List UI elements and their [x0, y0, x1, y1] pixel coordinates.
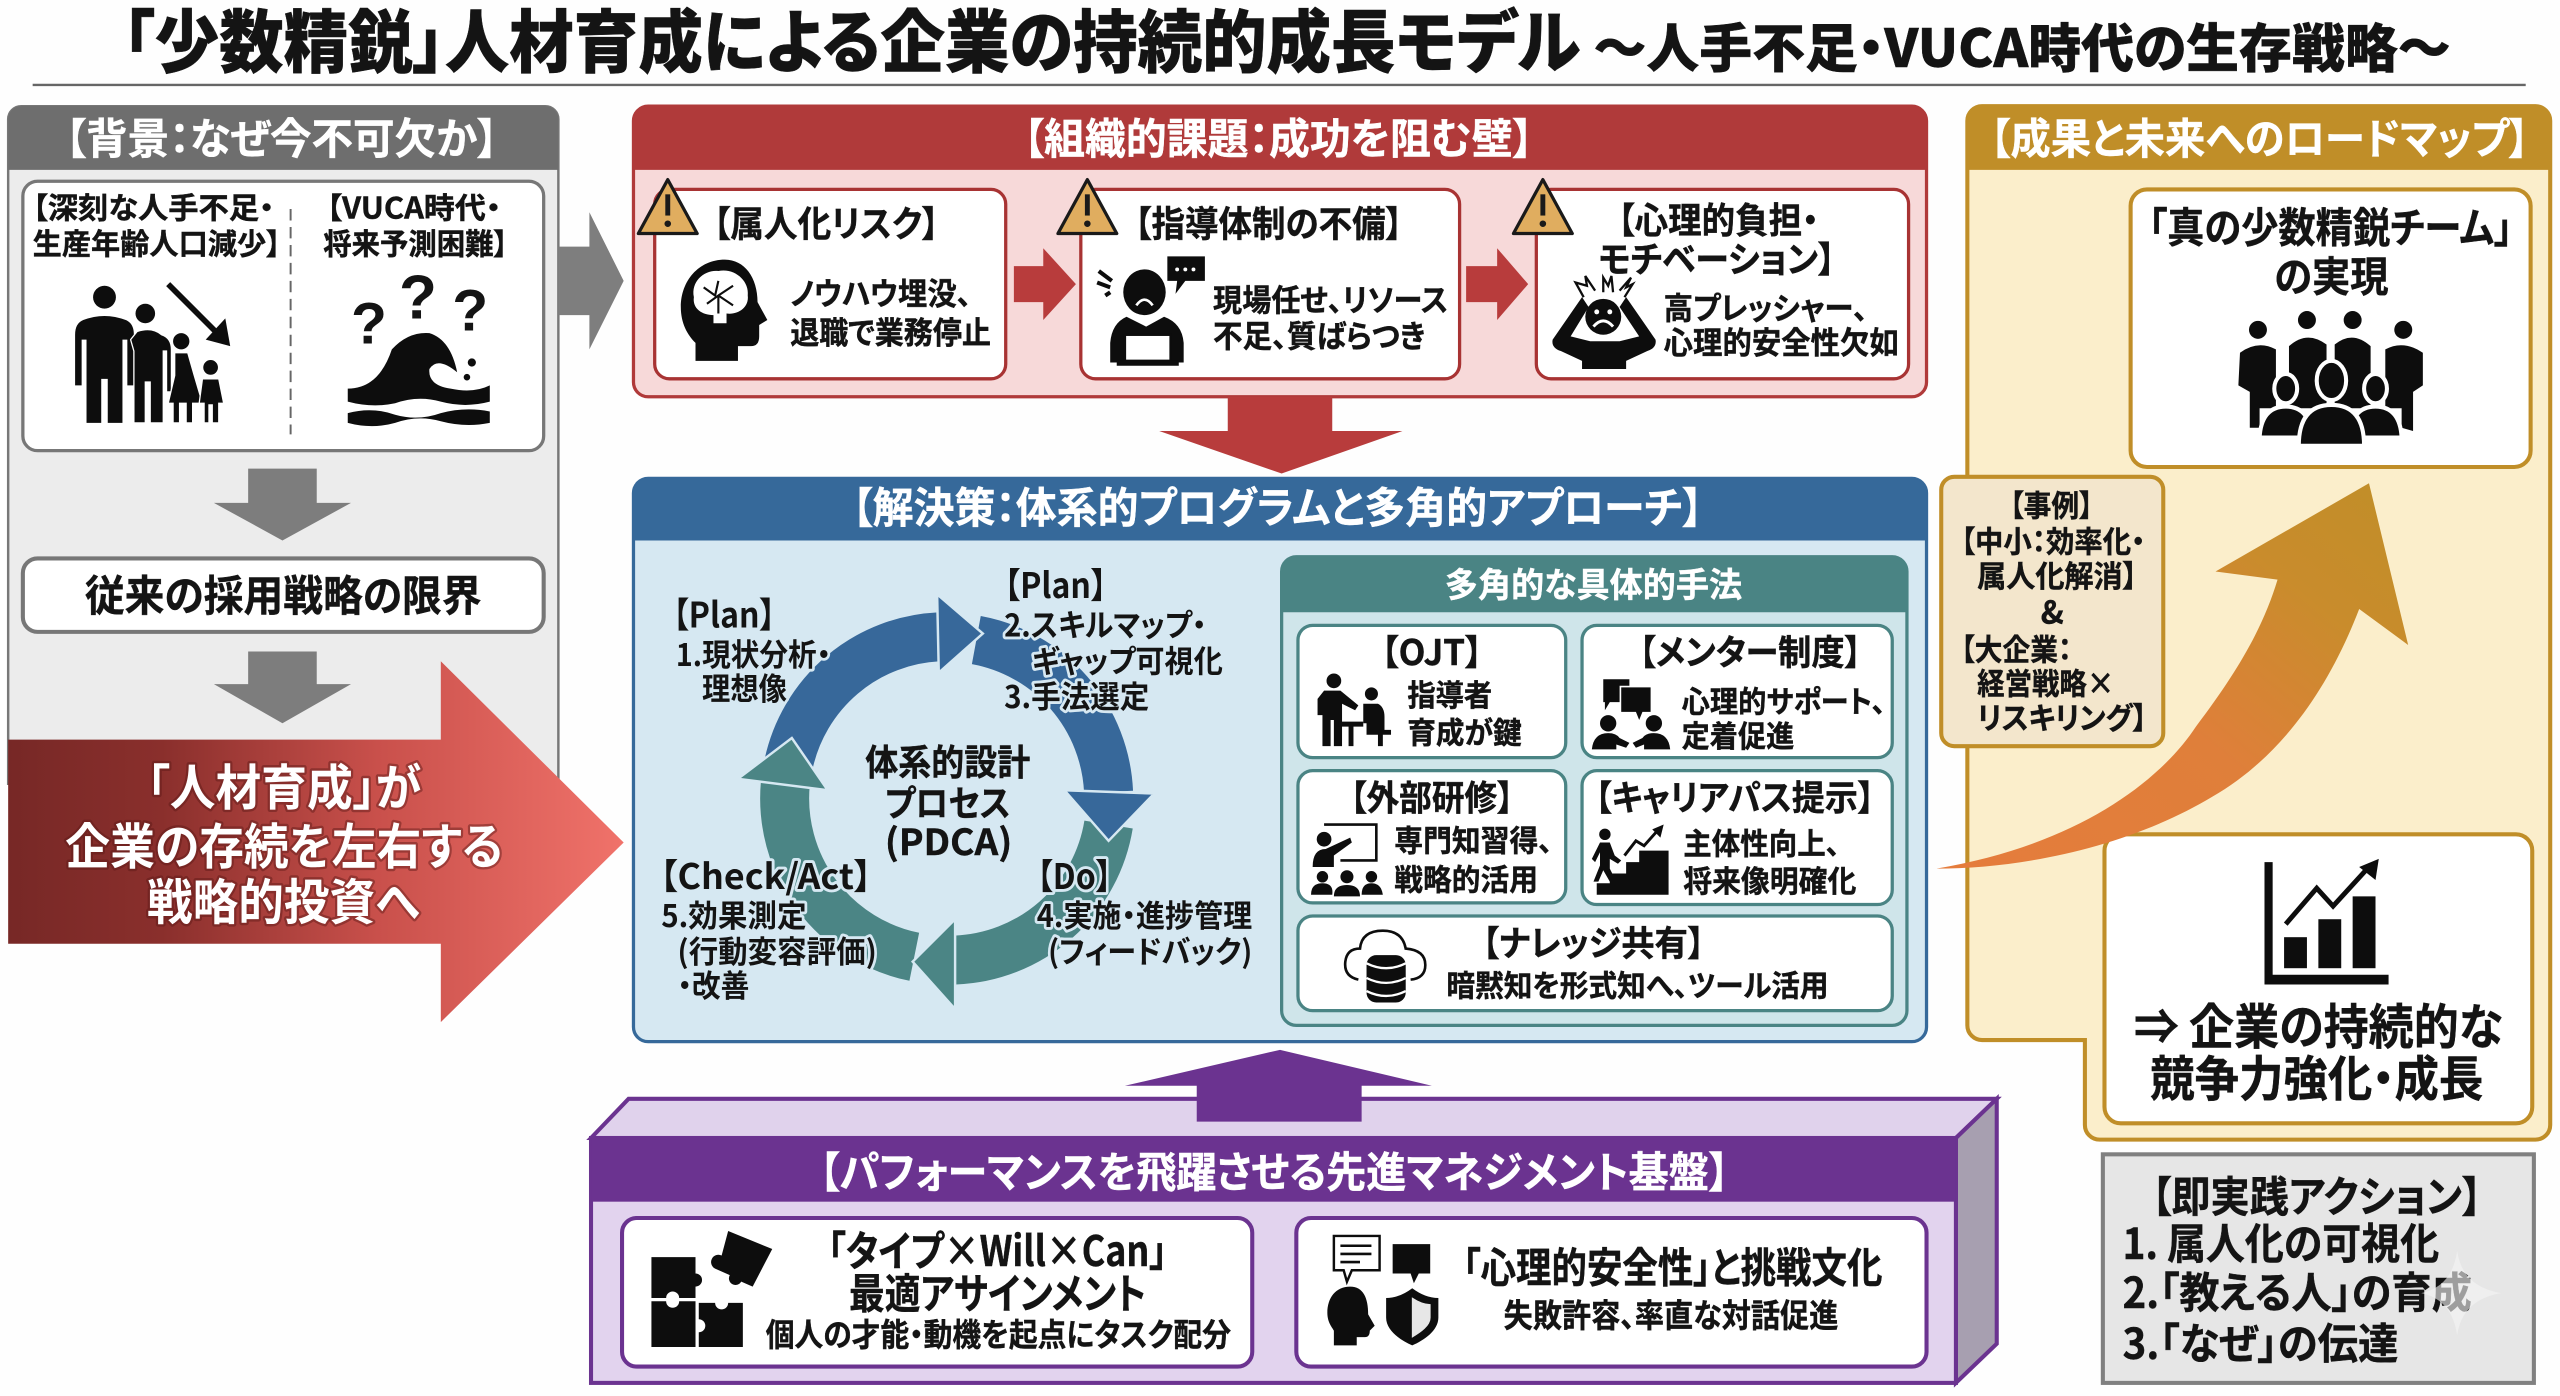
card: optimal assignment: 「タイプ×Will×Can」 [828, 1218, 1167, 1278]
arrow: red connector [1466, 248, 1528, 320]
icon: warning [1058, 180, 1117, 234]
chart: PDCA cycle: 【Check/Act】 [660, 849, 872, 900]
card: external training: 【外部研修】 [1350, 770, 1513, 821]
card: mentor system: 定着促進 [1682, 712, 1794, 756]
card: labour shortage and VUCA: 将来予測困難】 [323, 221, 508, 263]
card: optimal assignment: 個人の才能・動機を起点にタスク配分 [766, 1310, 1231, 1356]
title [122, 0, 2451, 87]
card: knowledge sharing [1298, 916, 1892, 1011]
card: psychological burden: モチベーション】 [1598, 231, 1835, 283]
chart: PDCA cycle: 1.現状分析・ [676, 630, 831, 675]
icon: warning [1513, 180, 1572, 234]
arrow: strategic investment [8, 661, 624, 1022]
icon: puzzle pieces [651, 1231, 772, 1347]
challenges heading [633, 106, 1927, 170]
chart: PDCA cycle: 【Do】 [1037, 849, 1112, 900]
callout: immediate actions [2103, 1154, 2534, 1383]
front face [591, 1138, 1956, 1383]
callout: immediate actions: 2.「教える人」の育成 [2122, 1260, 2472, 1321]
arrow: red connector [1014, 248, 1076, 320]
arrow: grey down [214, 651, 351, 723]
icon: speech, head and shield [1327, 1236, 1438, 1345]
card: labour shortage and VUCA: 生産年齢人口減少】 [33, 221, 281, 263]
chart: PDCA cycle: 【Plan】 [673, 588, 776, 639]
icon: classroom lecture [1311, 825, 1383, 896]
icon: stressed person [1552, 276, 1656, 369]
arrow: purple up [1125, 1050, 1432, 1122]
card: mentor system [1582, 625, 1892, 758]
card: psychological safety: 失敗許容、率直な対話促進 [1504, 1290, 1838, 1337]
icon: sparkle [2421, 1251, 2501, 1336]
arrow: growth curve [1936, 483, 2408, 869]
card: external training: 専門知習得、 [1394, 816, 1553, 860]
callout: case studies: 【中小：効率化・ [1961, 518, 2145, 562]
card: psychological safety: 「心理的安全性」と挑戦文化 [1463, 1235, 1882, 1295]
chart: PDCA cycle: (行動変容評価) [678, 927, 877, 972]
card: labour shortage and VUCA: 【VUCA時代・ [327, 186, 501, 228]
card: optimal assignment: 最適アサインメント [849, 1261, 1146, 1321]
icon: wave with question marks: ? [452, 279, 488, 344]
chart: PDCA cycle: 3.手法選定 [1004, 672, 1149, 717]
arrow: red down to solutions [1159, 397, 1402, 474]
card: knowledge sharing: 【ナレッジ共有】 [1482, 916, 1704, 967]
card: lack of mentoring system: 【指導体制の不備】 [1135, 195, 1402, 247]
chart: PDCA cycle: (PDCA) [885, 814, 1012, 866]
card: sustainable competitiveness [2104, 834, 2532, 1123]
card: true elite team: の実現 [2274, 244, 2389, 304]
panel: management foundation [591, 1050, 1997, 1383]
top face [591, 1099, 1997, 1138]
chart: PDCA cycle: 4.実施・進捗管理 [1037, 891, 1252, 936]
callout: case studies: 【事例】 [2010, 482, 2093, 526]
background heading: 【背景：なぜ今不可欠か】 [65, 106, 498, 167]
card: career path: 【キャリアパス提示】 [1595, 770, 1874, 821]
solutions heading [633, 475, 1927, 540]
callout: immediate actions: 1. 属人化の可視化 [2122, 1211, 2439, 1272]
callout: case studies: 経営戦略× [1977, 660, 2114, 704]
card: psychological burden: 高プレッシャー、 [1664, 284, 1868, 329]
callout: immediate actions: 【即実践アクション】 [2152, 1164, 2482, 1225]
arrow: strategic investment: 「人材育成」が [147, 749, 421, 820]
chart: PDCA cycle: ギャップ可視化 [1032, 636, 1223, 681]
icon: growth chart [2264, 859, 2389, 985]
box: limits of conventional hiring: 従来の採用戦略の限界 [85, 563, 482, 624]
title: ～人手不足・VUCA時代の生存戦略～ [1593, 7, 2451, 83]
chart: PDCA cycle: 体系的設計 [865, 734, 1030, 786]
card: psychological safety [1296, 1218, 1927, 1367]
card: psychological burden: 心理的安全性欠如 [1664, 318, 1899, 363]
panel: concrete methods [1282, 557, 1907, 1025]
challenges heading: 【組織的課題：成功を阻む壁】 [1024, 106, 1533, 167]
chart: PDCA cycle: ・改善 [678, 961, 749, 1006]
icon: wave with question marks: ? [351, 292, 387, 357]
card: optimal assignment [622, 1218, 1252, 1367]
card: OJT: 指導者 [1407, 671, 1492, 715]
arrow: grey to challenges [558, 212, 624, 349]
callout: case studies: & [2041, 587, 2064, 632]
callout: case studies [1941, 477, 2163, 746]
icon: mentor conversation [1592, 679, 1670, 749]
methods heading [1282, 557, 1907, 612]
card: OJT: 【OJT】 [1381, 625, 1482, 676]
panel: background [8, 106, 558, 784]
card: true elite team: 「真の少数精鋭チーム」 [2149, 195, 2513, 255]
solutions heading: 【解決策：体系的プログラムと多角的アプローチ】 [852, 475, 1703, 536]
callout: immediate actions: 3.「なぜ」の伝達 [2122, 1311, 2398, 1372]
icon: head with brain [681, 260, 767, 361]
card: OJT [1298, 625, 1566, 758]
card: key-person risk: 【属人化リスク】 [713, 195, 939, 247]
card: sustainable competitiveness: ⇒ 企業の持続的な [2134, 988, 2503, 1058]
chart: PDCA cycle: (フィードバック) [1048, 927, 1252, 972]
icon: cloud database [1345, 931, 1425, 1002]
icon: wave with question marks: ? [399, 263, 437, 332]
card: career path [1582, 770, 1892, 905]
card: psychological burden [1513, 180, 1909, 379]
box: limits of conventional hiring [23, 558, 544, 632]
card: mentor system: 【メンター制度】 [1639, 625, 1861, 676]
card: external training: 戦略的活用 [1394, 856, 1538, 900]
card: sustainable competitiveness: 競争力強化・成長 [2150, 1040, 2483, 1110]
card: lack of mentoring system: 現場任せ、リソース [1213, 276, 1448, 320]
chart: PDCA cycle: 2.スキルマップ・ [1004, 600, 1207, 645]
card: external training [1298, 770, 1566, 903]
card: key-person risk: 退職で業務停止 [790, 308, 991, 353]
chart: PDCA cycle [660, 558, 1252, 1009]
chart: PDCA cycle: 5.効果測定 [661, 891, 807, 936]
foundation heading: 【パフォーマンスを飛躍させる先進マネジメント基盤】 [820, 1139, 1729, 1200]
icon: worried worker with laptop [1097, 256, 1205, 366]
card: knowledge sharing: 暗黙知を形式知へ、ツール活用 [1447, 962, 1829, 1006]
card: true elite team [2131, 189, 2531, 467]
callout: case studies: リスキリング】 [1977, 694, 2147, 738]
card: career path: 将来像明確化 [1683, 857, 1856, 901]
card: labour shortage and VUCA [23, 181, 544, 451]
icon: team of people [2238, 311, 2423, 446]
card: OJT: 育成が鍵 [1407, 709, 1522, 753]
chart: PDCA cycle: プロセス [885, 775, 1011, 827]
card: career path: 主体性向上、 [1683, 820, 1840, 864]
callout: case studies: 【大企業： [1961, 625, 2072, 669]
arrow: grey down [214, 469, 351, 540]
icon: trainer and trainee [1318, 674, 1391, 746]
icon: stairs and climber [1592, 825, 1669, 895]
card: psychological burden: 【心理的負担・ [1618, 192, 1819, 244]
card: lack of mentoring system: 不足、質ばらつき [1213, 311, 1425, 356]
card: mentor system: 心理的サポート、 [1682, 678, 1886, 722]
side face [1956, 1099, 1997, 1383]
icon: wave with question marks [348, 264, 490, 426]
methods heading: 多角的な具体的手法 [1445, 557, 1742, 607]
roadmap heading: 【成果と未来へのロードマップ】 [1990, 106, 2529, 167]
panel: organisational challenges [633, 106, 1927, 397]
callout: case studies: 属人化解消】 [1977, 552, 2137, 596]
icon: shrinking family [75, 284, 230, 423]
foundation heading [591, 1138, 1956, 1202]
card: key-person risk: ノウハウ埋没、 [790, 269, 971, 314]
chart: PDCA cycle: 理想像 [702, 664, 787, 709]
arrow: strategic investment: 戦略的投資へ [147, 863, 420, 934]
card: lack of mentoring system [1058, 180, 1460, 379]
arrow: strategic investment: 企業の存続を左右する [65, 808, 503, 879]
icon: warning [638, 180, 697, 234]
panel: results and roadmap [1967, 106, 2550, 1140]
card: key-person risk [638, 180, 1006, 379]
panel: solutions [633, 475, 1927, 1042]
chart: PDCA cycle: 【Plan】 [1004, 558, 1107, 609]
card: labour shortage and VUCA: 【深刻な人手不足・ [33, 186, 274, 228]
